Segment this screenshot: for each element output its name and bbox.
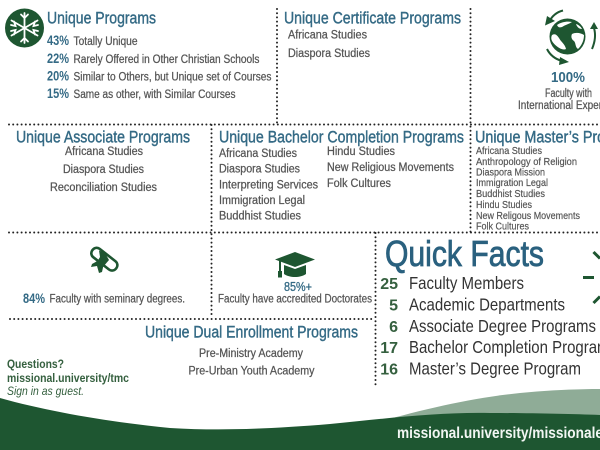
heading: certificate: Unique Certificate Programs [284,10,461,28]
footer dark green wave [0,398,600,450]
panel: accredited doctorates [218,252,372,306]
fact: academic departments: Academic Departments [409,294,565,314]
list: master's programs: Immigration Legal [476,177,548,189]
list: bachelor column one: Immigration Legal [219,195,305,207]
stat: 15% [47,86,236,101]
list: dual enrollment: Pre-Urban Youth Academy [188,366,315,378]
list: master's programs: Anthropology of Religion [476,156,577,168]
panel: unique certificate programs [284,10,461,60]
heading: associate: Unique Associate Programs [16,128,190,146]
list: bachelor column two: New Religious Movements [327,162,454,174]
stat: 43%: Totally Unique [74,36,138,48]
panel: unique dual enrollment programs [145,324,358,378]
list: certificate programs [288,30,370,60]
stat: 15%: 15% [47,86,69,101]
fact: master's degree program: 16 [380,362,398,378]
list: master's programs: Buddhist Studies [476,188,545,200]
fact: faculty members: Faculty Members [409,273,524,293]
list: associate programs: Diaspora Studies [63,164,144,176]
icon: snowflake [5,8,44,48]
icon: graduation cap [275,252,315,278]
stat: 22%: 22% [47,51,69,66]
stat: 43% [47,33,138,48]
panel: unique associate programs [16,128,190,194]
list: bachelor column two: Hindu Studies [327,146,395,158]
text: faculty with seminary degrees: Faculty with seminary degrees. [50,294,185,306]
heading: bachelor: Unique Bachelor Completion Programs [219,128,464,146]
panel: seminary degrees [23,246,185,306]
list: bachelor column two [327,146,454,190]
panel: quick facts [380,233,600,378]
list: bachelor column one: Africana Studies [219,148,297,160]
list: associate programs [50,146,157,194]
stat: 15%: Same as other, with Similar Courses [74,89,236,101]
list: dual enrollment [188,348,315,378]
list: bachelor column one: Interpreting Services [219,180,318,192]
callout: questions: Questions? [7,357,64,371]
callout: questions [7,357,129,398]
fact: bachelor completion programs: 17 [380,340,398,357]
list: bachelor column one: Buddhist Studies [219,210,301,222]
callout: questions: Sign in as guest. [7,384,84,398]
callout: questions: missional.university/tmc [7,371,129,385]
stat: 84%: 84% [23,291,45,306]
panel: international experience [518,10,600,112]
list: associate programs: Africana Studies [65,146,143,158]
list: master's programs [476,145,580,232]
icon: globe with arrows [545,10,598,65]
list: certificate programs: Diaspora Studies [288,48,370,60]
list: bachelor column two: Folk Cultures [327,178,391,190]
list: master's programs: New Religous Movements [476,210,580,222]
stat: 22%: Rarely Offered in Other Christian Schools [74,54,260,66]
stat: 20% [47,68,272,84]
text: faculty with international experience [518,88,600,112]
panel: unique programs [5,8,272,101]
footer light green wave [375,389,600,430]
list: dual enrollment: Pre-Ministry Academy [199,348,303,360]
stat: 20%: Similar to Others, but Unique set of Courses [74,72,272,84]
stat: 20%: 20% [47,68,69,84]
list: bachelor column one [219,148,318,222]
list: certificate programs: Africana Studies [288,30,367,42]
stat: 22% [47,51,260,66]
heading: quick facts: Quick Facts [385,233,544,274]
list: master's programs: Africana Studies [476,145,542,157]
heading: dual enrollment: Unique Dual Enrollment Programs [145,324,358,342]
icon: diploma [89,246,119,273]
stat: 43%: 43% [47,33,69,48]
stat: 100%: 100% [551,70,585,86]
heading: unique programs: Unique Programs [47,10,156,28]
list: bachelor column one: Diaspora Studies [219,164,300,176]
stat: 85%+: 85%+ [284,279,312,294]
list: master's programs: Hindu Studies [476,199,532,211]
list: master's programs: Diaspora Mission [476,166,545,178]
fact: associate degree programs: 6 [389,319,398,336]
fact: faculty members: 25 [380,276,398,293]
panel: unique bachelor completion programs [219,128,464,222]
list: master's programs: Folk Cultures [476,220,529,232]
panel: unique master's programs [475,128,600,232]
icon: clipped green rays [583,252,600,303]
list: associate programs: Reconciliation Studies [50,182,157,194]
text: faculty have accredited doctorates: Faculty have accredited Doctorates [218,294,372,306]
fact: academic departments: 5 [389,298,398,314]
